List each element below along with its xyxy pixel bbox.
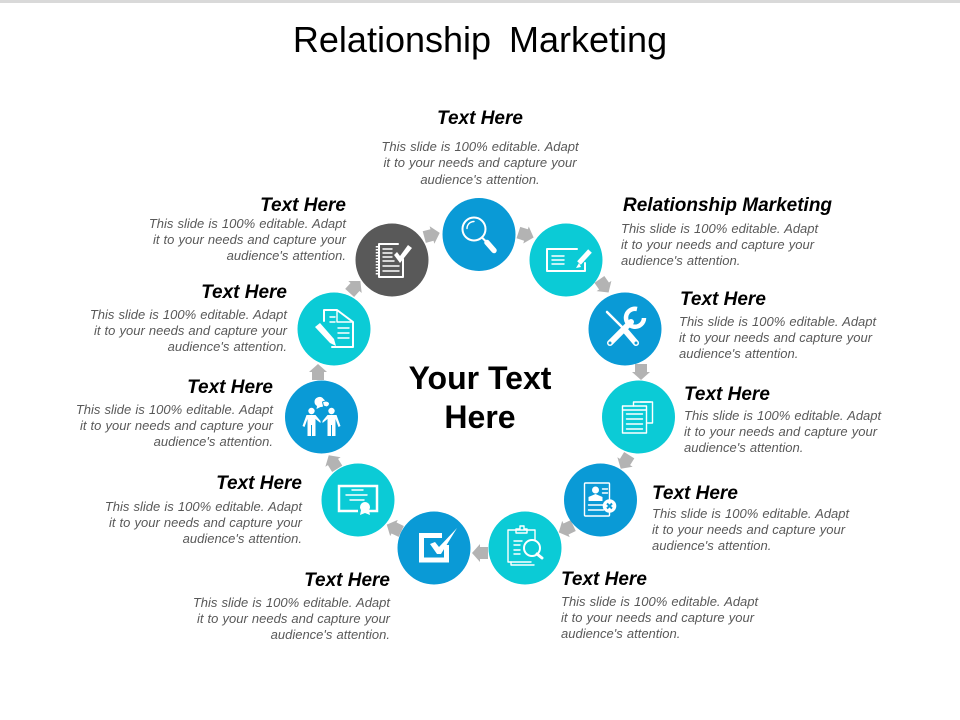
text block: checklist bbox=[149, 195, 347, 263]
node: profile reject icon bbox=[564, 464, 637, 536]
node: clipboard search icon bbox=[488, 512, 562, 584]
text block: top: it to your needs and capture your bbox=[383, 155, 577, 170]
center text: Here bbox=[444, 399, 516, 435]
text block: checkbox: This slide is 100% editable. Adapt bbox=[193, 595, 391, 610]
text block: document: it to your needs and capture your bbox=[94, 323, 288, 338]
text block: tools: Text Here bbox=[680, 289, 766, 310]
node: document and pencil icon bbox=[298, 292, 370, 366]
node: checkbox icon bbox=[398, 512, 470, 584]
node: card and pencil icon bbox=[530, 224, 602, 296]
node: checklist notepad icon bbox=[356, 224, 428, 296]
text block: checkbox: it to your needs and capture your bbox=[197, 611, 391, 626]
text block: people: it to your needs and capture your bbox=[80, 418, 274, 433]
text block: clipboard: Text Here bbox=[561, 569, 647, 590]
text block: checkbox: Text Here bbox=[304, 570, 390, 591]
text block: people bbox=[76, 377, 274, 449]
text block: certificate: audience's attention. bbox=[183, 531, 302, 546]
text block: tools: it to your needs and capture your bbox=[679, 330, 873, 345]
text block: top: audience's attention. bbox=[420, 172, 540, 187]
text block: checklist: it to your needs and capture your bbox=[153, 232, 347, 247]
text block: relationship marketing bbox=[621, 195, 832, 268]
text block: checklist: audience's attention. bbox=[227, 248, 346, 263]
text block: relationship marketing: Relationship Marketing bbox=[623, 195, 832, 216]
text block: people: Text Here bbox=[187, 377, 273, 398]
center text: Your Text bbox=[409, 360, 552, 396]
text block: tools bbox=[679, 289, 878, 361]
text block: clipboard: audience's attention. bbox=[561, 626, 680, 641]
text block: certificate bbox=[105, 473, 303, 546]
text block: profile: it to your needs and capture your bbox=[652, 522, 846, 537]
node: people talking icon bbox=[285, 380, 358, 454]
node: tools icon bbox=[588, 292, 662, 366]
text block: top: Text Here bbox=[437, 108, 523, 129]
text block: checklist: This slide is 100% editable. Adapt bbox=[149, 216, 347, 231]
text block: documents: Text Here bbox=[684, 384, 770, 405]
text block: tools: audience's attention. bbox=[679, 346, 798, 361]
text block: documents: audience's attention. bbox=[684, 440, 803, 455]
title: Relationship Marketing bbox=[293, 19, 667, 60]
text block: document: audience's attention. bbox=[168, 339, 287, 354]
text block: document: This slide is 100% editable. Adapt bbox=[90, 307, 288, 322]
text block: certificate: Text Here bbox=[216, 473, 302, 494]
text block: profile: This slide is 100% editable. Adapt bbox=[652, 506, 851, 521]
text block: relationship marketing: audience's attention. bbox=[621, 253, 740, 268]
text block: clipboard: This slide is 100% editable. Adapt bbox=[561, 594, 760, 609]
text block: relationship marketing: This slide is 100% editable. Adapt bbox=[621, 221, 820, 236]
text block: certificate: it to your needs and capture your bbox=[109, 515, 303, 530]
node: certificate icon bbox=[322, 464, 394, 536]
text block: top: This slide is 100% editable. Adapt bbox=[381, 139, 580, 154]
text block: documents bbox=[684, 384, 883, 455]
text block: clipboard: it to your needs and capture your bbox=[561, 610, 755, 625]
text block: profile bbox=[652, 483, 851, 553]
text block: document bbox=[90, 282, 288, 354]
text block: checkbox: audience's attention. bbox=[271, 627, 390, 642]
node: documents icon bbox=[602, 380, 675, 454]
text block: profile: Text Here bbox=[652, 483, 738, 504]
text block: relationship marketing: it to your needs and capture your bbox=[621, 237, 815, 252]
text block: people: This slide is 100% editable. Adapt bbox=[76, 402, 274, 417]
text block: documents: This slide is 100% editable. Adapt bbox=[684, 408, 883, 423]
center text bbox=[409, 360, 552, 435]
text block: top bbox=[381, 108, 580, 187]
arrows ring bbox=[309, 224, 650, 562]
text block: clipboard bbox=[561, 569, 760, 641]
text block: checklist: Text Here bbox=[260, 195, 346, 216]
text block: documents: it to your needs and capture your bbox=[684, 424, 878, 439]
text block: profile: audience's attention. bbox=[652, 538, 771, 553]
text block: document: Text Here bbox=[201, 282, 287, 303]
node: magnifier icon bbox=[442, 198, 516, 271]
text block: tools: This slide is 100% editable. Adapt bbox=[679, 314, 878, 329]
text block: certificate: This slide is 100% editable. Adapt bbox=[105, 499, 303, 514]
text block: checkbox bbox=[193, 570, 391, 642]
text block: people: audience's attention. bbox=[154, 434, 273, 449]
